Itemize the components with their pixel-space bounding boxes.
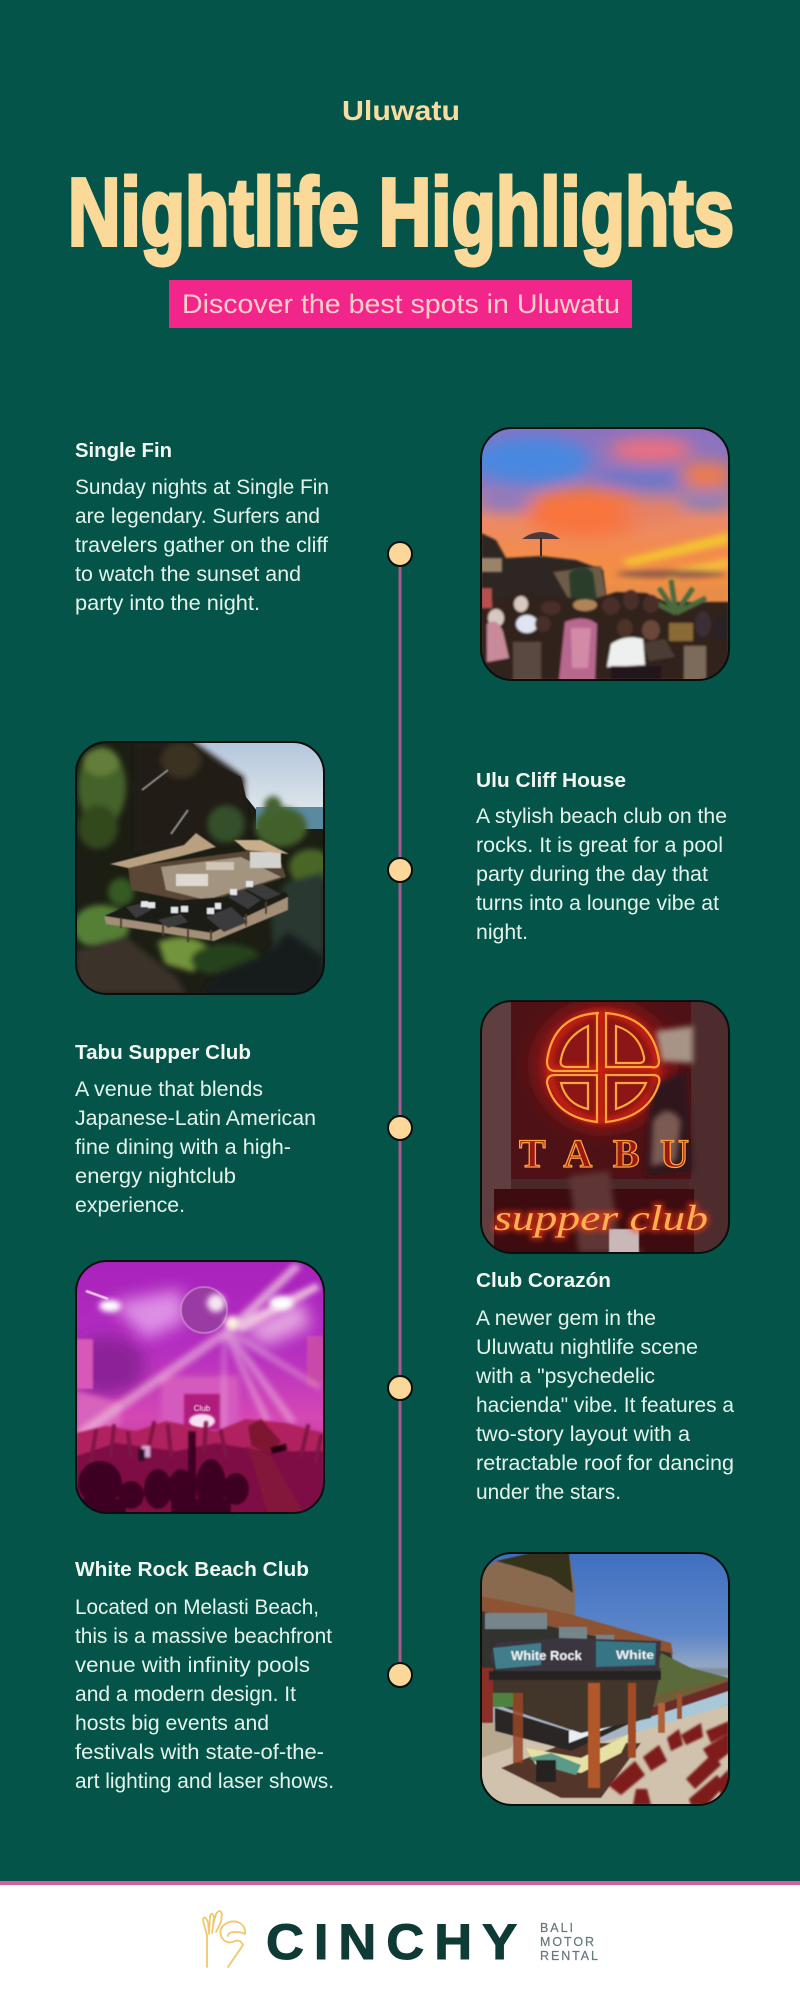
photo: Tabu neon sign: [481, 1001, 729, 1253]
text block: Tabu Supper Club: energy nightclub: [75, 1165, 236, 1188]
text block: Ulu Cliff House: A stylish beach club on the: [476, 805, 727, 828]
text block: Ulu Cliff House: [476, 769, 727, 944]
text block: Club Corazón: [475, 1269, 734, 1504]
text block: Tabu Supper Club: A venue that blends: [75, 1078, 263, 1101]
photo: Ulu Cliff House: [73, 742, 333, 994]
timeline dot 5: [388, 1663, 412, 1687]
text block: White Rock Beach Club: art lighting and laser shows.: [75, 1770, 334, 1793]
upper deck: [128, 847, 286, 904]
kitchen block: [494, 1708, 628, 1752]
pillars: [588, 1683, 600, 1788]
kicker: Uluwatu: Uluwatu: [342, 95, 460, 126]
logo tagline: BALI: [540, 1921, 573, 1935]
text block: Tabu Supper Club: fine dining with a high-: [75, 1136, 291, 1159]
text block: Single Fin: are legendary. Surfers and: [75, 505, 320, 528]
text block: Tabu Supper Club: Tabu Supper Club: [75, 1041, 251, 1064]
text block: Ulu Cliff House: Ulu Cliff House: [476, 769, 626, 792]
light beams: [111, 1289, 311, 1346]
subtitle banner: Discover the best spots in Uluwatu: [182, 289, 620, 319]
text block: Club Corazón: hacienda" vibe. It features a: [476, 1394, 734, 1417]
rooftop sign: [489, 1638, 661, 1675]
logo wordmark: CINCHY: CINCHY: [266, 1914, 527, 1970]
ground: [481, 1705, 729, 1805]
neon text: TABU: TABU: [519, 1131, 689, 1176]
icon: hand logo: [203, 1911, 245, 1967]
logo tagline: RENTAL: [540, 1949, 598, 1963]
text block: Ulu Cliff House: rocks. It is great for a pool: [476, 834, 723, 857]
text block: Club Corazón: under the stars.: [476, 1481, 621, 1504]
text block: White Rock Beach Club: this is a massive beachfront: [75, 1625, 332, 1648]
thatched roofs: [110, 833, 216, 868]
text block: Ulu Cliff House: night.: [476, 921, 528, 944]
subtitle banner: [169, 280, 632, 328]
text block: Ulu Cliff House: turns into a lounge vibe at: [476, 892, 719, 915]
photo: Club Corazón dance floor: Club: [194, 1404, 211, 1413]
disco ball: [181, 1287, 227, 1333]
photo: Club Corazón dance floor: [66, 1261, 324, 1514]
text block: Club Corazón: Club Corazón: [476, 1269, 611, 1292]
text block: Tabu Supper Club: experience.: [75, 1194, 185, 1217]
text block: White Rock Beach Club: hosts big events and: [75, 1712, 269, 1735]
photo: Single Fin sunset crowd: [471, 428, 734, 680]
text block: Tabu Supper Club: [75, 1041, 316, 1217]
photo: White Rock Beach Club: White Rock: [511, 1648, 583, 1663]
lower deck: [104, 892, 289, 933]
timeline dot 3: [388, 1116, 412, 1140]
timeline dot 4: [388, 1376, 412, 1400]
umbrella: [522, 532, 560, 539]
text block: Single Fin: party into the night.: [75, 592, 260, 615]
text block: White Rock Beach Club: and a modern design. It: [75, 1683, 296, 1706]
neon text: supper club: supper club: [494, 1198, 708, 1238]
logo tagline: MOTOR: [540, 1935, 594, 1949]
text block: Club Corazón: two-story layout with a: [476, 1423, 690, 1446]
timeline dot 2: [388, 858, 412, 882]
text block: Single Fin: travelers gather on the cliff: [75, 534, 328, 557]
text block: Single Fin: Sunday nights at Single Fin: [75, 476, 329, 499]
neon emblem: [547, 1013, 659, 1122]
timeline line: [398, 554, 402, 1675]
text block: Single Fin: to watch the sunset and: [75, 563, 301, 586]
neon text: supper club: supper club: [494, 1198, 708, 1238]
text block: White Rock Beach Club: festivals with state-of-the-: [75, 1741, 324, 1764]
text block: Tabu Supper Club: Japanese-Latin American: [75, 1107, 316, 1130]
photo: White Rock Beach Club: White: [616, 1648, 654, 1662]
text block: Club Corazón: with a "psychedelic: [475, 1365, 655, 1388]
timeline: [388, 542, 412, 1687]
photo: White Rock Beach Club: [481, 1553, 729, 1805]
logo tagline: [540, 1921, 598, 1963]
text block: White Rock Beach Club: White Rock Beach Club: [75, 1558, 309, 1581]
text block: Single Fin: Single Fin: [75, 439, 172, 462]
crowd: [76, 1419, 324, 1514]
text block: Club Corazón: retractable roof for dancing: [476, 1452, 734, 1475]
timeline dot 1: [388, 542, 412, 566]
text block: White Rock Beach Club: [75, 1558, 334, 1793]
footer band: [0, 1881, 800, 2000]
text block: White Rock Beach Club: venue with infinity pools: [75, 1654, 310, 1677]
text block: White Rock Beach Club: Located on Melasti Beach,: [75, 1596, 319, 1619]
text block: Club Corazón: Uluwatu nightlife scene: [476, 1336, 698, 1359]
infinity pool: [635, 1690, 728, 1732]
text block: Club Corazón: A newer gem in the: [476, 1307, 656, 1330]
text block: Single Fin: [75, 439, 329, 615]
text block: Ulu Cliff House: party during the day that: [476, 863, 708, 886]
red loungers: [608, 1721, 729, 1805]
